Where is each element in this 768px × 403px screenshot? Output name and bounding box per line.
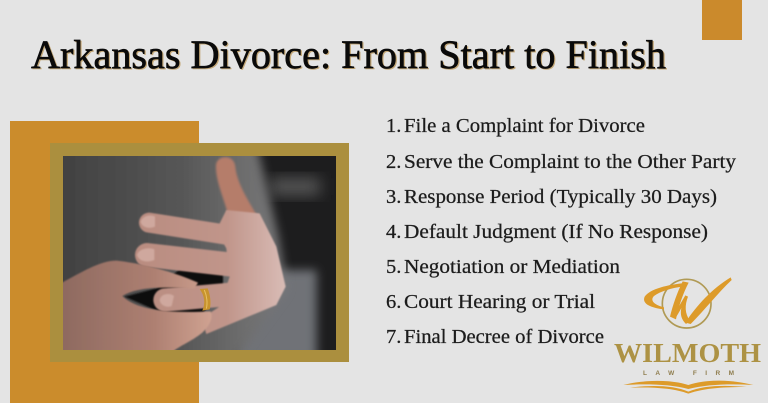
logo wordmark: WILMOTH bbox=[614, 337, 761, 368]
step 6: 6. bbox=[386, 291, 401, 313]
logo emblem bbox=[644, 277, 732, 328]
lower hand bbox=[60, 261, 212, 352]
wedding ring bbox=[200, 288, 210, 311]
step 4: 4. bbox=[386, 221, 401, 243]
step 1: File a Complaint for Divorce bbox=[404, 115, 645, 137]
step 4: Default Judgment (If No Response) bbox=[404, 221, 708, 243]
title: Arkansas Divorce: From Start to Finish bbox=[31, 32, 666, 77]
steps list bbox=[386, 115, 737, 348]
corner accent block bbox=[702, 0, 742, 40]
step 3: 3. bbox=[386, 186, 401, 208]
logo book swoosh bbox=[623, 381, 753, 394]
photo: hands removing wedding ring bbox=[63, 156, 336, 350]
step 2: 2. bbox=[386, 151, 401, 173]
step 1: 1. bbox=[386, 115, 401, 137]
step 7: Final Decree of Divorce bbox=[404, 326, 604, 348]
photo frame bbox=[50, 143, 349, 362]
logo tagline: LAW FIRM bbox=[643, 370, 734, 377]
title: Arkansas Divorce: From Start to Finish bbox=[32, 33, 667, 78]
step 5: Negotiation or Mediation bbox=[404, 256, 620, 278]
step 3: Response Period (Typically 30 Days) bbox=[404, 186, 717, 208]
step 7: 7. bbox=[386, 326, 401, 348]
logo: Wilmoth Law Firm bbox=[614, 277, 761, 394]
fingernails bbox=[137, 215, 174, 307]
step 5: 5. bbox=[386, 256, 401, 278]
dark gaps between hands bbox=[125, 269, 223, 313]
step 6: Court Hearing or Trial bbox=[404, 291, 595, 313]
upper hand bbox=[147, 210, 286, 334]
step 2: Serve the Complaint to the Other Party bbox=[404, 151, 737, 173]
orange backing panel bbox=[10, 121, 199, 403]
